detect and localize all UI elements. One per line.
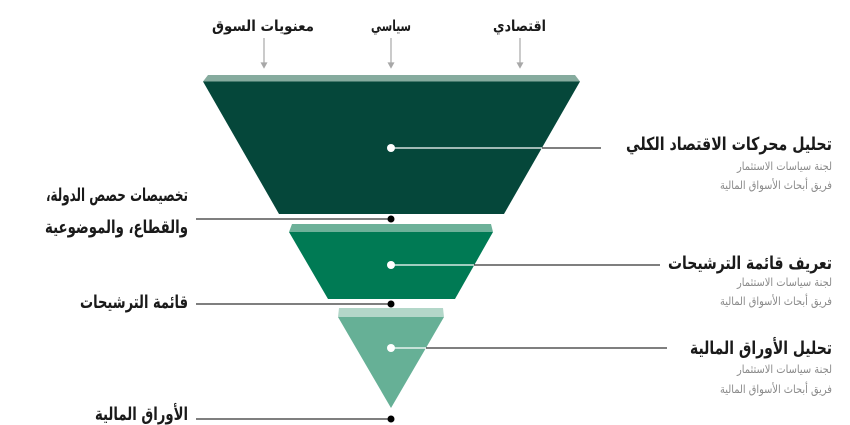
funnel stage 2: [289, 224, 493, 299]
callout owner 2: فريق أبحاث الأسواق المالية: [720, 381, 832, 397]
top labels with arrows: [212, 17, 546, 68]
stage 2 body: [289, 232, 493, 299]
stage 1 body: [203, 82, 580, 214]
leader: allocations: [196, 216, 394, 222]
label: allocations line 2: والقطاع، والموضوعية: [45, 217, 188, 238]
callout: shortlist definition: [668, 253, 832, 309]
callout owner 2: فريق أبحاث الأسواق المالية: [720, 177, 832, 193]
leader: macro analysis: [387, 144, 601, 152]
label: allocations line 1: تخصيصات حصص الدولة،: [46, 185, 188, 206]
left text labels: [45, 185, 188, 425]
funnel stage 1: [203, 75, 580, 214]
left leader lines: [196, 216, 394, 422]
leader: securities: [196, 416, 394, 422]
funnel stage 3: [338, 308, 444, 408]
right leader lines: [387, 144, 667, 352]
label: economic: اقتصادي: [493, 17, 546, 36]
callout owner 1: لجنة سياسات الاستثمار: [736, 362, 832, 377]
callout owner 1: لجنة سياسات الاستثمار: [736, 159, 832, 174]
callout owner 2: فريق أبحاث الأسواق المالية: [720, 293, 832, 309]
label: political: سياسي: [371, 17, 411, 35]
stage 3 body: [338, 317, 444, 408]
leader: shortlist: [196, 300, 394, 308]
callout: securities analysis: [690, 337, 832, 397]
leader: shortlist definition: [387, 261, 660, 269]
label: market sentiment: معنويات السوق: [212, 17, 314, 35]
arrow: economic: [518, 38, 522, 68]
label: shortlist: قائمة الترشيحات: [80, 292, 188, 313]
callout: macro analysis: [626, 134, 832, 193]
leader: securities analysis: [387, 344, 667, 352]
arrow: market sentiment: [262, 38, 266, 68]
callout owner 1: لجنة سياسات الاستثمار: [736, 275, 832, 290]
stage 1 top band: [203, 75, 580, 82]
stage 2 top band: [289, 224, 493, 232]
label: securities: الأوراق المالية: [95, 403, 188, 425]
arrow: political: [388, 38, 394, 68]
stage 3 top band: [338, 308, 444, 317]
